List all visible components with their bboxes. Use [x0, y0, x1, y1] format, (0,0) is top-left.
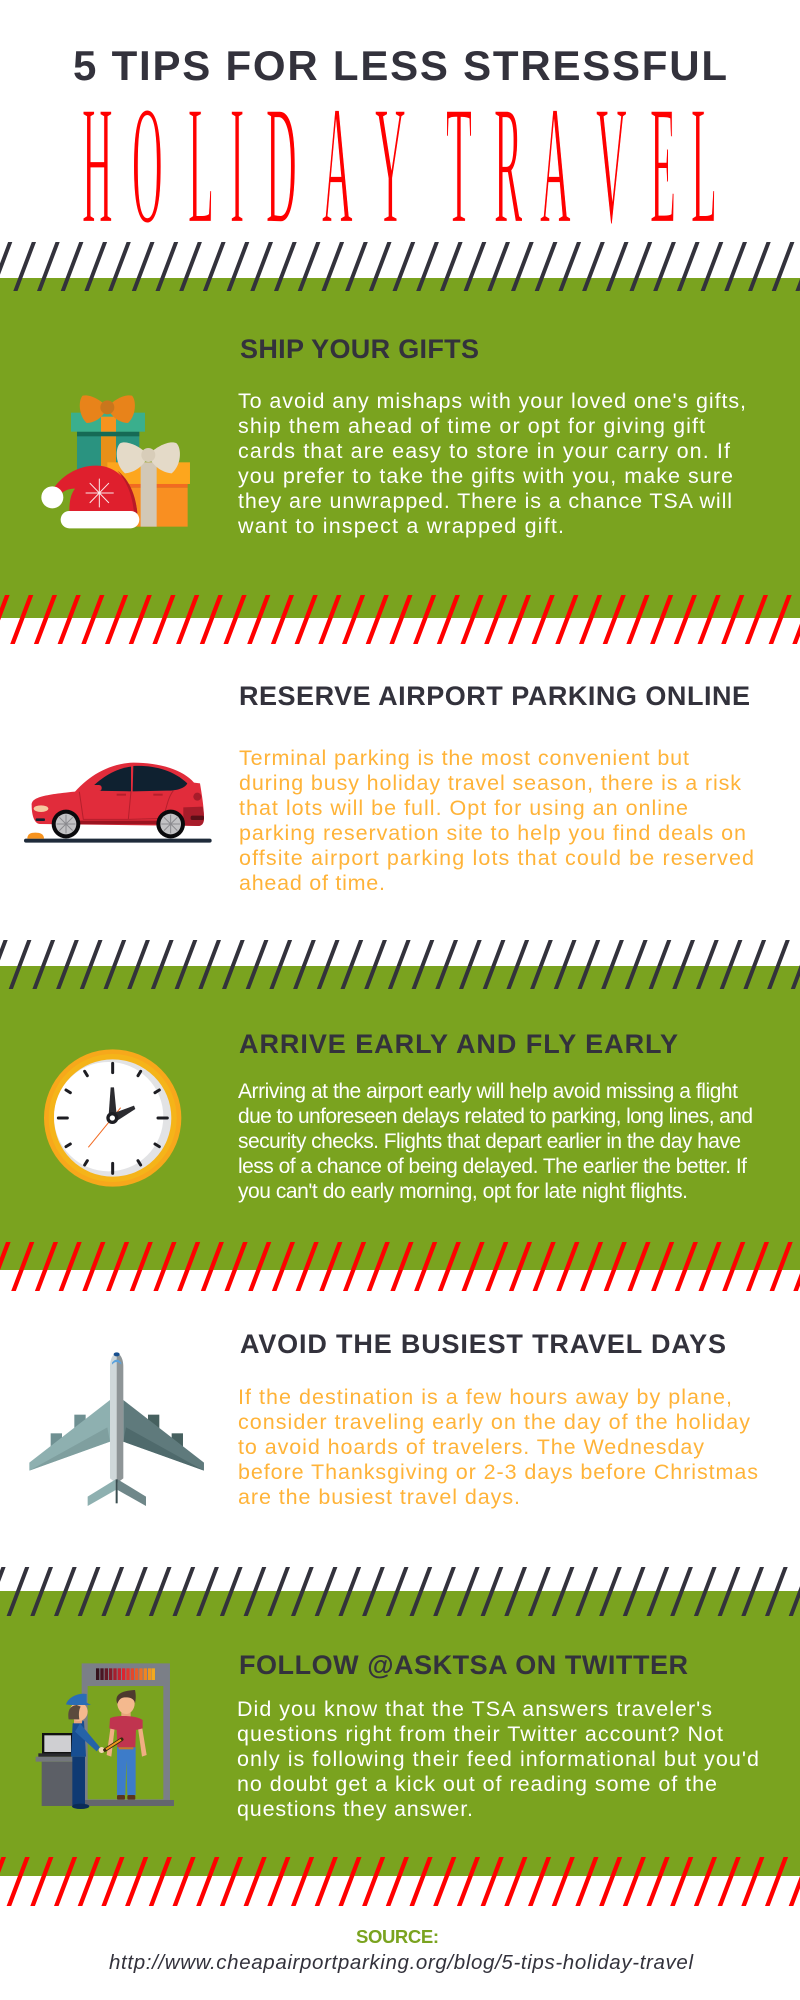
panel: arrive early background [0, 966, 800, 1270]
title line two: holiday travel: HOLIDAY TRAVEL [82, 71, 717, 259]
icon: red car [24, 763, 212, 843]
text block: follow asktsa: only is following their feed informational but you'd [237, 1747, 759, 1771]
text block: follow asktsa: no doubt get a kick out of reading some of the [237, 1772, 717, 1796]
text block: arrive early: security checks. Flights that depart earlier in the day have [238, 1130, 741, 1153]
stripe band: red 3 [0, 1857, 800, 1906]
icon: clock [44, 1049, 181, 1187]
stripe band: dark 1 [0, 242, 800, 291]
text block: ship your gifts: ship them ahead of time or opt for giving gift [238, 414, 705, 438]
text block: reserve airport parking: parking reservation site to help you find deals on [239, 821, 746, 845]
text block: avoid busiest days: If the destination is a few hours away by plane, [238, 1385, 732, 1409]
text block: follow asktsa: Did you know that the TSA answers traveler's [237, 1697, 712, 1721]
panel: follow asktsa background [0, 1591, 800, 1876]
text block: arrive early: Arriving at the airport early will help avoid missing a flight [238, 1080, 738, 1103]
text block: ship your gifts: you prefer to take the gifts with you, make sure [238, 464, 733, 488]
heading: follow asktsa on twitter: FOLLOW @ASKTSA ON TWITTER [239, 1650, 688, 1680]
text block: ship your gifts: cards that are easy to store in your carry on. If [238, 439, 730, 463]
text block: avoid busiest days [238, 1385, 758, 1509]
text block: follow asktsa [237, 1697, 759, 1821]
heading: avoid the busiest travel days: AVOID THE BUSIEST TRAVEL DAYS [240, 1329, 726, 1359]
stripe band: dark 2 [0, 940, 800, 989]
text block: avoid busiest days: consider traveling early on the day of the holiday [238, 1410, 750, 1434]
icon: airplane [29, 1352, 204, 1506]
stripe band: dark 3 [0, 1567, 800, 1616]
title line one: 5 TIPS FOR LESS STRESSFUL [73, 42, 727, 89]
text block: ship your gifts: they are unwrapped. There is a chance TSA will [238, 489, 732, 513]
heading: ship your gifts: SHIP YOUR GIFTS [240, 334, 479, 364]
icon: gifts and santa hat [41, 395, 190, 528]
text block: avoid busiest days: before Thanksgiving or 2-3 days before Christmas [238, 1460, 758, 1484]
text block: arrive early: due to unforeseen delays related to parking, long lines, and [238, 1105, 753, 1128]
text block: follow asktsa: questions they answer. [237, 1797, 473, 1821]
text block: ship your gifts: want to inspect a wrapped gift. [237, 514, 564, 538]
text block: ship your gifts: To avoid any mishaps with your loved one's gifts, [238, 389, 746, 413]
text block: reserve airport parking: Terminal parking is the most convenient but [239, 746, 689, 770]
stripe band: red 2 [0, 1242, 800, 1291]
text block: arrive early [238, 1080, 753, 1203]
text block: reserve airport parking: ahead of time. [239, 871, 385, 895]
source label: SOURCE: [356, 1926, 439, 1947]
text block: reserve airport parking: that lots will be full. Opt for using an online [239, 796, 688, 820]
text block: avoid busiest days: to avoid hoards of travelers. The Wednesday [238, 1435, 704, 1459]
text block: reserve airport parking: offsite airport parking lots that could be reserved [239, 846, 754, 870]
text block: follow asktsa: questions right from their Twitter account? Not [237, 1722, 723, 1746]
text block: ship your gifts [237, 389, 746, 538]
panel: ship your gifts background [0, 278, 800, 618]
text block: reserve airport parking [239, 746, 754, 895]
source url: http://www.cheapairportparking.org/blog/5-tips-holiday-travel [109, 1951, 694, 1974]
stripe band: red 1 [0, 595, 800, 644]
icon: airport security scanner [36, 1663, 174, 1809]
heading: arrive early and fly early: ARRIVE EARLY AND FLY EARLY [239, 1029, 678, 1059]
heading: reserve airport parking online: RESERVE AIRPORT PARKING ONLINE [239, 681, 750, 711]
text block: arrive early: you can't do early morning, opt for late night flights. [238, 1180, 688, 1203]
text block: avoid busiest days: are the busiest travel days. [238, 1485, 520, 1509]
text block: reserve airport parking: during busy holiday travel season, there is a risk [239, 771, 741, 795]
text block: arrive early: less of a chance of being delayed. The earlier the better. If [238, 1155, 747, 1178]
